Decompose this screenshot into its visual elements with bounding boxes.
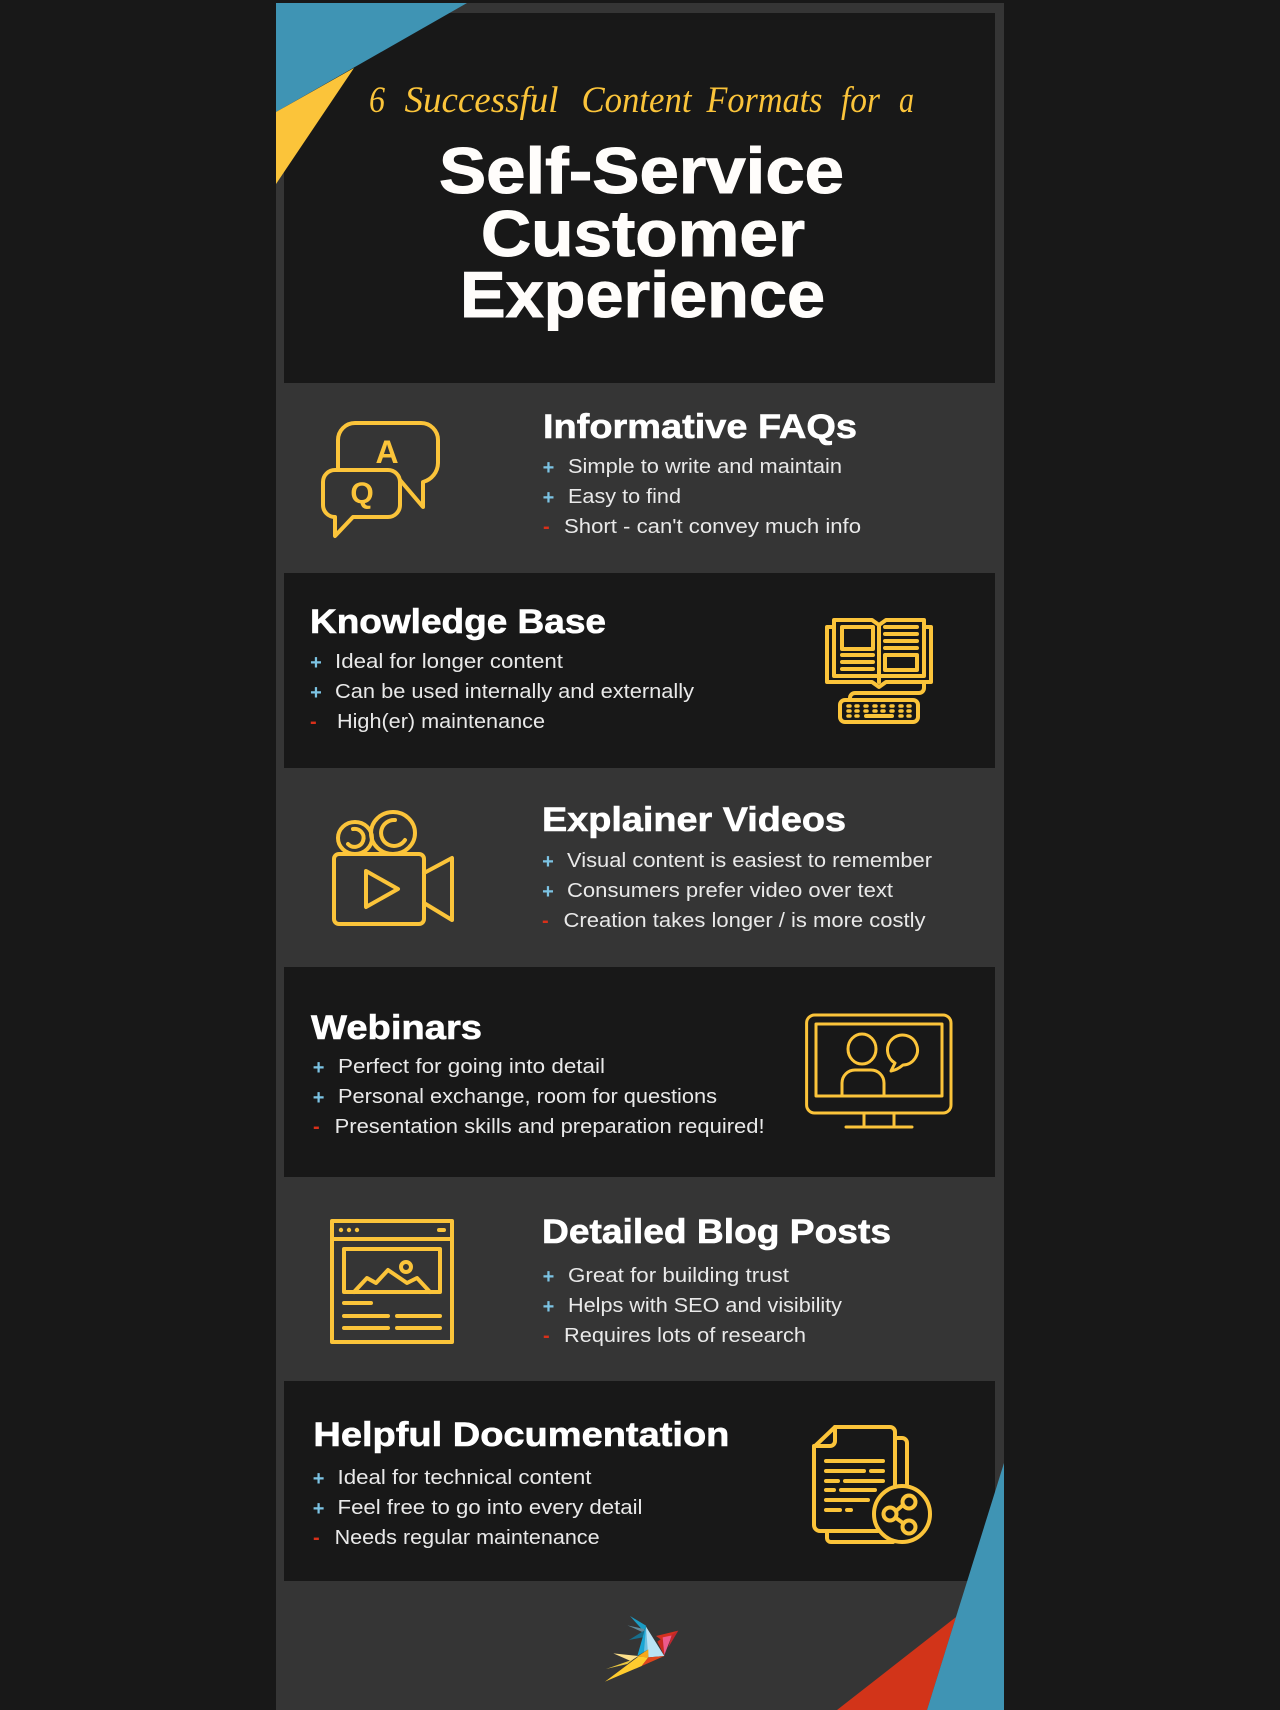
pro bullet: + xyxy=(543,487,554,509)
con bullet: - xyxy=(310,711,317,733)
subtitle: Successful xyxy=(404,80,558,121)
title: Experience xyxy=(460,258,825,331)
heading: Explainer Videos xyxy=(542,801,846,839)
icon: shared document xyxy=(814,1427,930,1542)
icon: question and answer bubbles: Q xyxy=(350,477,374,510)
pro bullet: + xyxy=(542,881,554,903)
heading: Helpful Documentation xyxy=(313,1416,729,1454)
pro bullet: Easy to find xyxy=(568,486,681,508)
con bullet: Needs regular maintenance xyxy=(335,1527,600,1549)
decoration: yellow corner triangle xyxy=(276,68,354,184)
panel: Webinars xyxy=(284,967,995,1177)
pro bullet: + xyxy=(313,1498,324,1520)
pro bullet: Perfect for going into detail xyxy=(338,1056,605,1078)
icon: question and answer bubbles: A xyxy=(375,434,399,470)
con bullet: Short - can't convey much info xyxy=(564,516,861,538)
con bullet: Presentation skills and preparation required! xyxy=(335,1116,765,1138)
title: Self-Service xyxy=(439,134,844,207)
heading: Detailed Blog Posts xyxy=(542,1213,891,1251)
icon: video camera xyxy=(334,812,452,924)
pro bullet: Visual content is easiest to remember xyxy=(567,850,932,872)
con bullet: - xyxy=(313,1116,320,1138)
subtitle: a xyxy=(899,80,914,121)
panel: Explainer Videos xyxy=(284,768,995,967)
panel: Helpful Documentation xyxy=(284,1381,995,1581)
subtitle: 6 xyxy=(369,80,385,121)
con bullet: Requires lots of research xyxy=(564,1325,806,1347)
pro bullet: + xyxy=(310,652,322,674)
icon: webinar monitor xyxy=(807,1015,951,1127)
pro bullet: Simple to write and maintain xyxy=(568,456,842,478)
pro bullet: Feel free to go into every detail xyxy=(338,1497,642,1519)
con bullet: - xyxy=(543,1325,550,1347)
icon: open book and keyboard xyxy=(827,620,931,722)
heading: Webinars xyxy=(311,1009,482,1047)
pro bullet: Can be used internally and externally xyxy=(335,681,694,703)
pro bullet: + xyxy=(313,1087,324,1109)
pro bullet: + xyxy=(310,682,322,704)
heading: Knowledge Base xyxy=(310,603,606,641)
pro bullet: + xyxy=(543,457,554,479)
pro bullet: + xyxy=(543,1266,554,1288)
con bullet: - xyxy=(313,1527,320,1549)
panel: Informative FAQs xyxy=(284,383,995,573)
decoration: blue corner triangle xyxy=(927,1463,1004,1710)
subtitle: Formats xyxy=(706,80,822,121)
con bullet: - xyxy=(542,910,549,932)
pro bullet: Great for building trust xyxy=(568,1265,789,1287)
pro bullet: Consumers prefer video over text xyxy=(567,880,893,902)
title: Customer xyxy=(481,197,805,270)
heading: Informative FAQs xyxy=(543,408,857,446)
pro bullet: + xyxy=(313,1468,324,1490)
title xyxy=(439,134,844,331)
decoration: red corner triangle xyxy=(837,1617,956,1710)
con bullet: High(er) maintenance xyxy=(337,711,545,733)
subtitle: Content xyxy=(582,80,693,121)
header panel xyxy=(276,3,995,383)
logo: origami bird xyxy=(605,1616,678,1682)
pro bullet: + xyxy=(542,851,554,873)
panel: Knowledge Base xyxy=(284,573,995,768)
icon: web page with picture xyxy=(332,1221,452,1342)
pro bullet: + xyxy=(313,1057,324,1079)
pro bullet: Ideal for technical content xyxy=(338,1467,592,1489)
pro bullet: Personal exchange, room for questions xyxy=(338,1086,717,1108)
pro bullet: Ideal for longer content xyxy=(335,651,563,673)
panel: Detailed Blog Posts xyxy=(284,1177,995,1381)
icon: question and answer bubbles xyxy=(323,423,438,536)
con bullet: - xyxy=(543,516,550,538)
pro bullet: + xyxy=(543,1296,554,1318)
con bullet: Creation takes longer / is more costly xyxy=(564,910,926,932)
subtitle: for xyxy=(841,80,881,121)
decoration: blue corner triangle xyxy=(276,3,467,112)
pro bullet: Helps with SEO and visibility xyxy=(568,1295,842,1317)
